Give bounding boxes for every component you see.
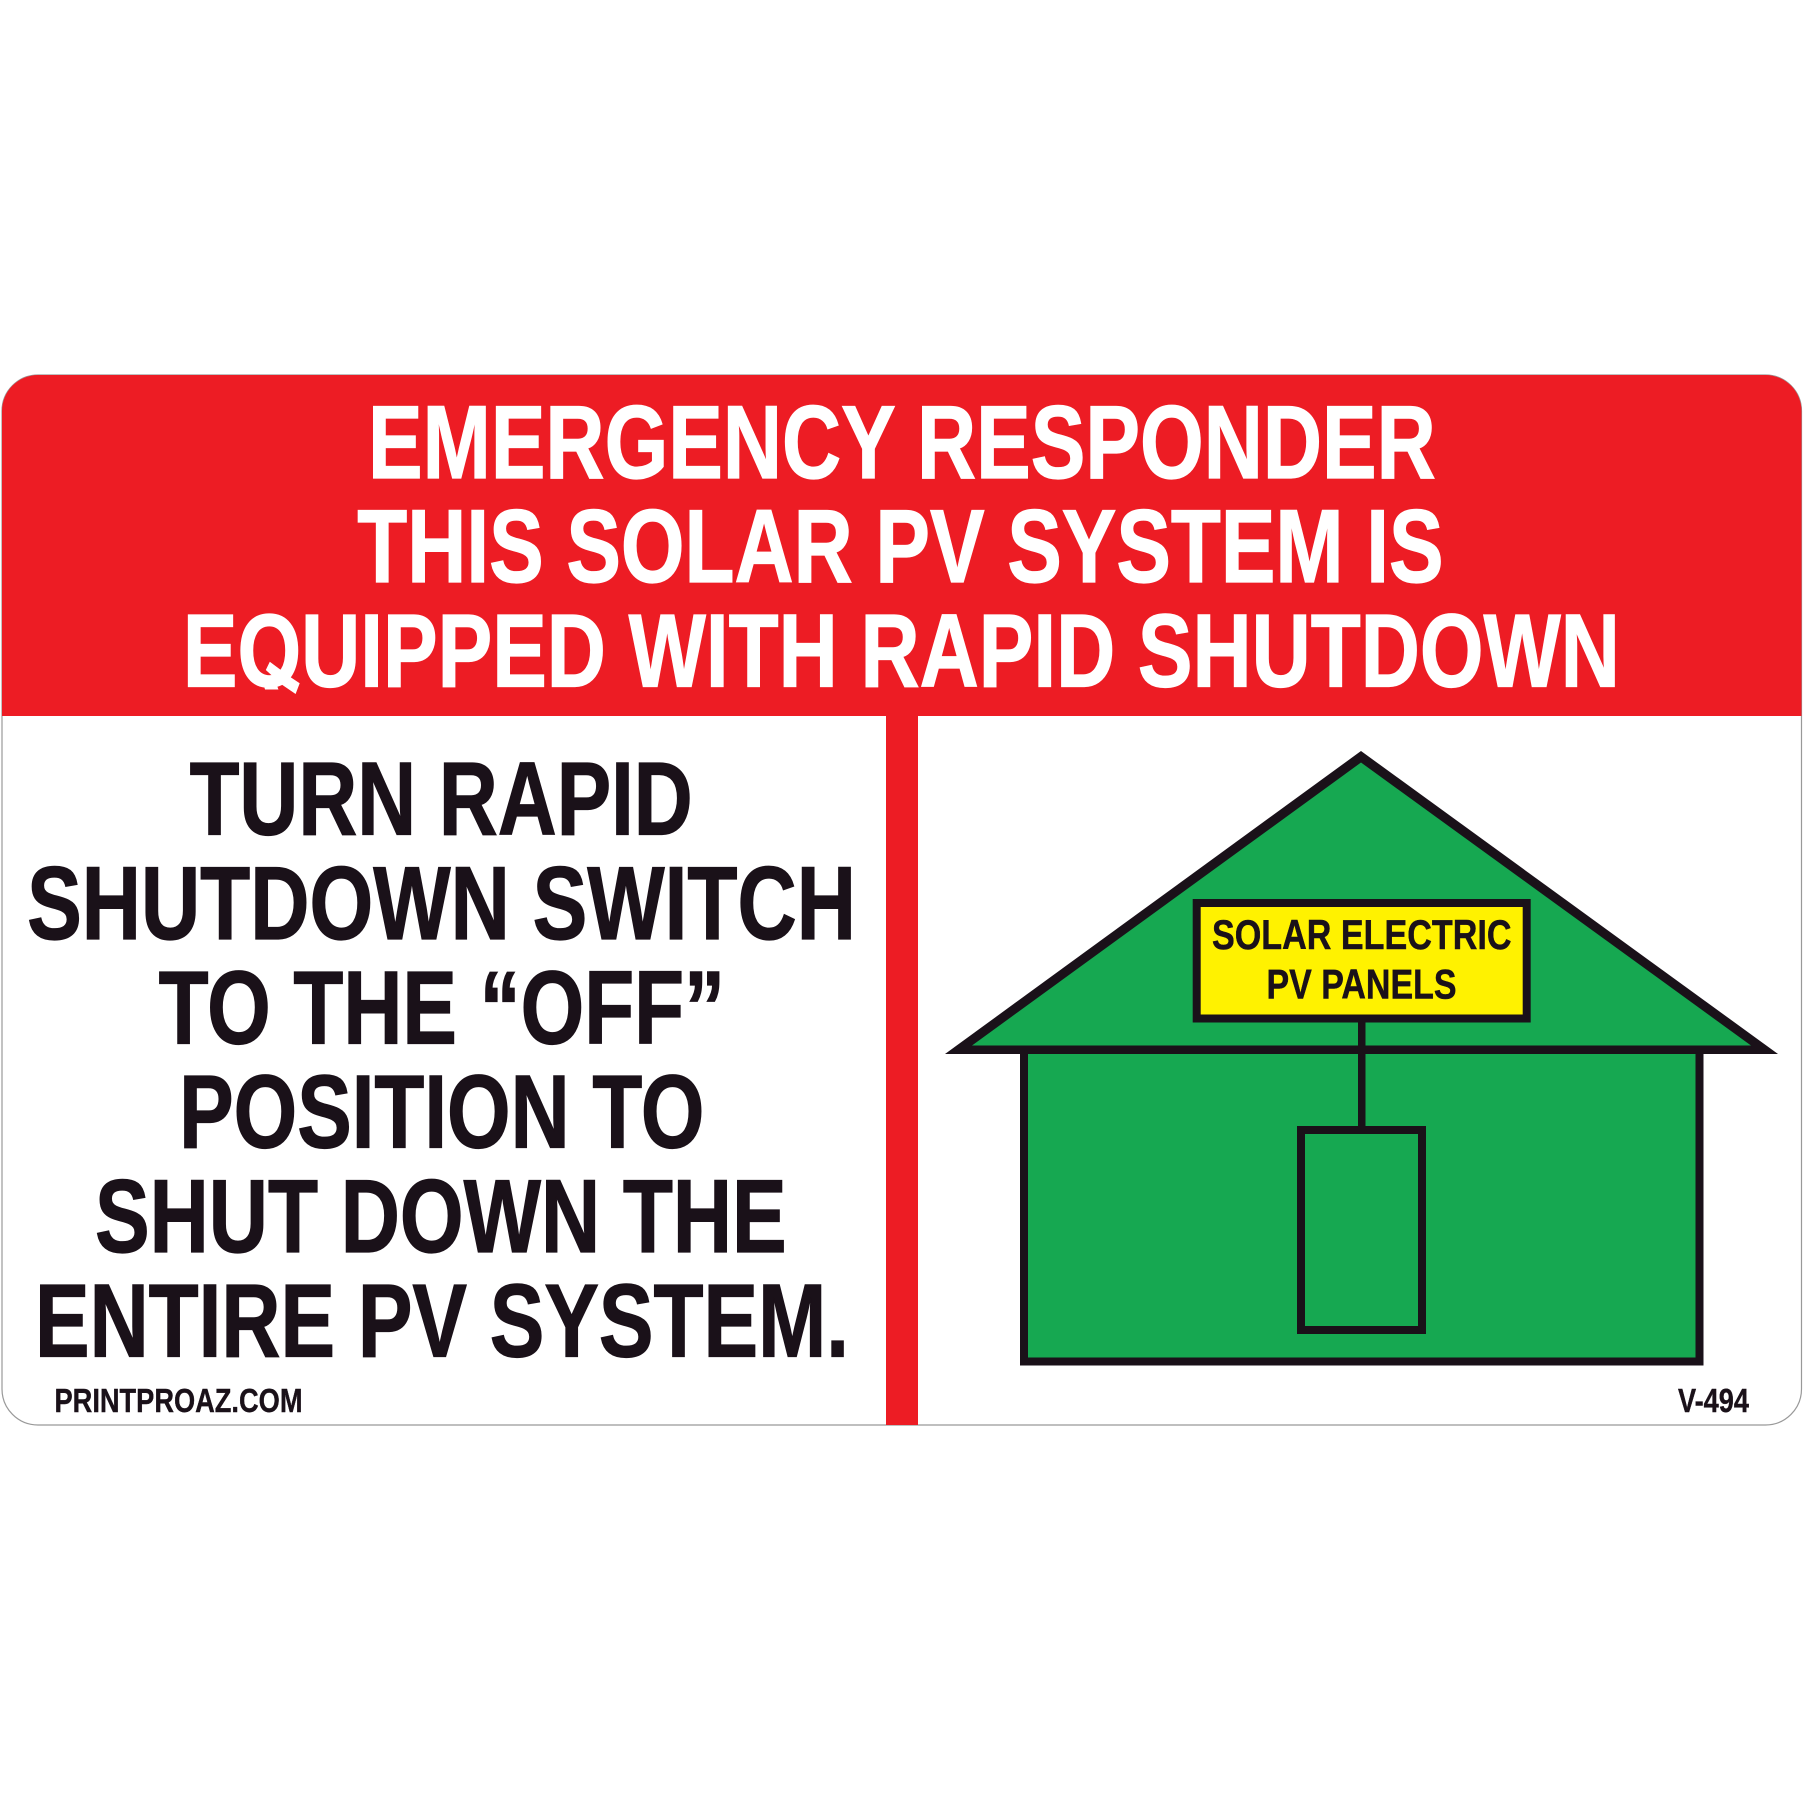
rapid shutdown switch box xyxy=(1301,1130,1422,1330)
footer: website: PRINTPROAZ.COM xyxy=(54,1383,302,1420)
sign label xyxy=(1,374,1802,1426)
red vertical divider xyxy=(886,715,918,1425)
footer: product code: V-494 xyxy=(1678,1383,1749,1420)
connector line from panels to switch xyxy=(1358,1020,1366,1132)
instruction line 5: SHUT DOWN THE xyxy=(95,1158,787,1274)
instruction line 6: ENTIRE PV SYSTEM. xyxy=(35,1262,849,1378)
solar panels sign xyxy=(1197,903,1527,1018)
heading line 1: EMERGENCY RESPONDER xyxy=(368,384,1436,500)
Q tail cover xyxy=(258,690,308,714)
house body xyxy=(1024,1050,1700,1362)
text block: shutdown instructions xyxy=(27,740,856,1378)
instruction line 2: SHUTDOWN SWITCH xyxy=(27,845,856,961)
panel: red header band xyxy=(2,375,1802,716)
sign text line 1: SOLAR ELECTRIC xyxy=(1212,911,1512,958)
instruction line 1: TURN RAPID xyxy=(190,740,693,856)
instruction line 4: POSITION TO xyxy=(179,1054,704,1170)
sign text line 2: PV PANELS xyxy=(1266,960,1456,1008)
instruction line 3: TO THE “OFF” xyxy=(159,950,725,1066)
heading: emergency responder notice xyxy=(183,384,1620,708)
icon: green house diagram xyxy=(945,751,1778,1362)
Q tail slash xyxy=(266,662,300,694)
house roof xyxy=(945,751,1778,1054)
heading line 2: THIS SOLAR PV SYSTEM IS xyxy=(357,488,1444,604)
panel: label background xyxy=(2,375,1802,1425)
